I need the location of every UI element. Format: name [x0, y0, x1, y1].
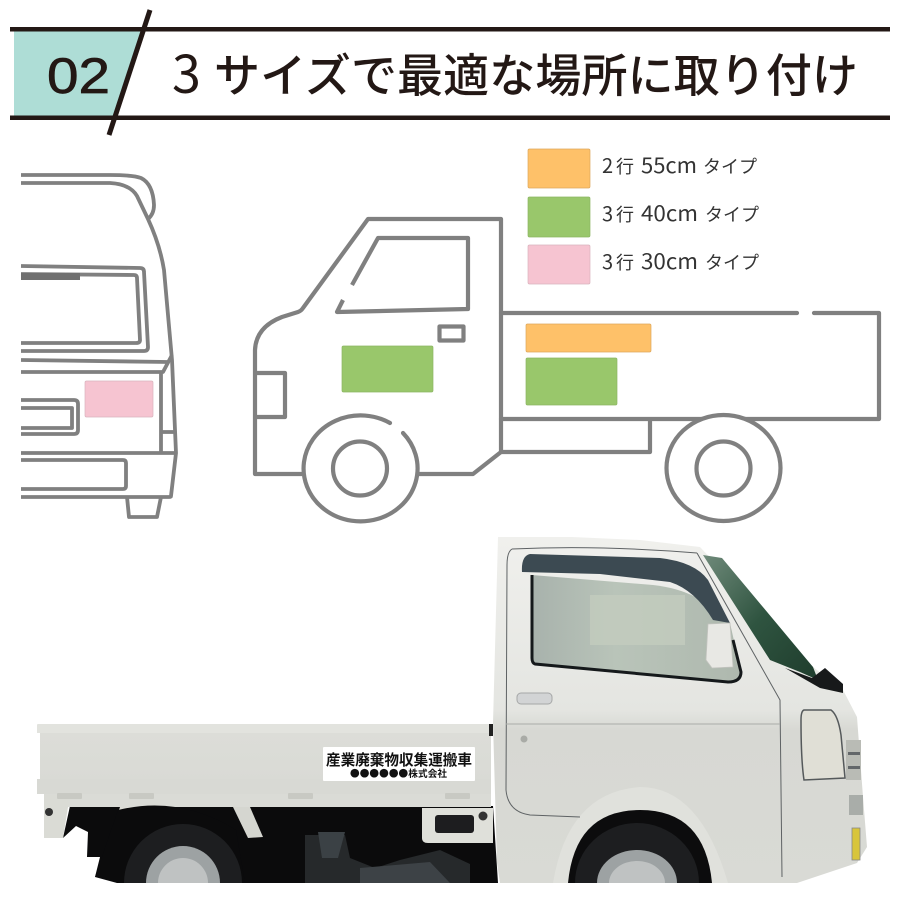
- legend label: 30cm: 30cm: [641, 246, 698, 276]
- door seams: [506, 548, 782, 877]
- door handle: [517, 693, 552, 704]
- legend swatch: 55cm: [528, 149, 590, 188]
- rear wheel: [95, 806, 245, 883]
- front wheel: [568, 810, 712, 883]
- header top rule: [10, 27, 890, 32]
- truck cab body: [493, 537, 867, 883]
- legend label: 55cm: 行: [616, 153, 634, 179]
- legend label: 30cm: 行: [616, 249, 634, 275]
- undercarriage: [63, 806, 498, 883]
- side view outline: [255, 219, 879, 474]
- front wheel: [304, 415, 418, 521]
- rear panel with lamp: [422, 808, 493, 843]
- truck bed: [37, 724, 493, 838]
- sign main text: 産業廃棄物収集運搬車: [326, 749, 472, 770]
- headlight: [801, 710, 845, 780]
- window reflection: [590, 595, 685, 645]
- windshield: [703, 555, 818, 680]
- side window: [532, 575, 741, 682]
- side view truck diagram: [255, 219, 879, 521]
- section number: 02: [47, 48, 110, 104]
- truck photo illustration: [37, 537, 867, 883]
- title numeral: 3: [172, 33, 201, 108]
- magnetic sign on bed: [323, 747, 475, 781]
- title words: サイズで最適な場所に取り付け: [214, 40, 858, 106]
- legend: [528, 149, 759, 284]
- number badge background: [14, 31, 143, 116]
- legend label: 40cm: 3: [602, 198, 613, 227]
- green 40cm sticker on door: [342, 346, 433, 392]
- window visor: [522, 554, 730, 623]
- legend swatch: 40cm: [528, 197, 590, 237]
- wiper and cowl: [785, 668, 843, 693]
- legend label: 30cm: 3: [602, 246, 613, 275]
- orange 55cm sticker on bed: [526, 324, 651, 352]
- rear wheel: [666, 415, 780, 521]
- pink 30cm sticker position: [85, 381, 153, 417]
- front grille: [846, 740, 863, 815]
- legend label: 40cm: 行: [616, 201, 634, 227]
- sign company text: ●●●●●●株式会社: [350, 766, 447, 780]
- door lock: [520, 736, 528, 742]
- rear view outline: [21, 175, 177, 517]
- green 40cm sticker on bed: [526, 358, 617, 405]
- title: [172, 33, 858, 108]
- legend label: 30cm: タイプ: [705, 249, 759, 275]
- legend label: 55cm: 55cm: [641, 150, 697, 180]
- legend label: 40cm: タイプ: [705, 201, 759, 227]
- header band: [10, 10, 890, 135]
- legend label: 55cm: タイプ: [703, 153, 757, 179]
- side mirror: [706, 623, 733, 668]
- legend label: 55cm: 2: [602, 150, 613, 179]
- rear wiper: [21, 273, 80, 280]
- slash divider: [109, 10, 150, 135]
- header bottom rule: [10, 116, 890, 120]
- legend swatch: 30cm: [528, 245, 590, 284]
- front fender flare: [553, 787, 728, 883]
- number plate: [852, 828, 860, 860]
- rear view truck diagram: [21, 175, 177, 517]
- legend label: 40cm: 40cm: [641, 198, 698, 228]
